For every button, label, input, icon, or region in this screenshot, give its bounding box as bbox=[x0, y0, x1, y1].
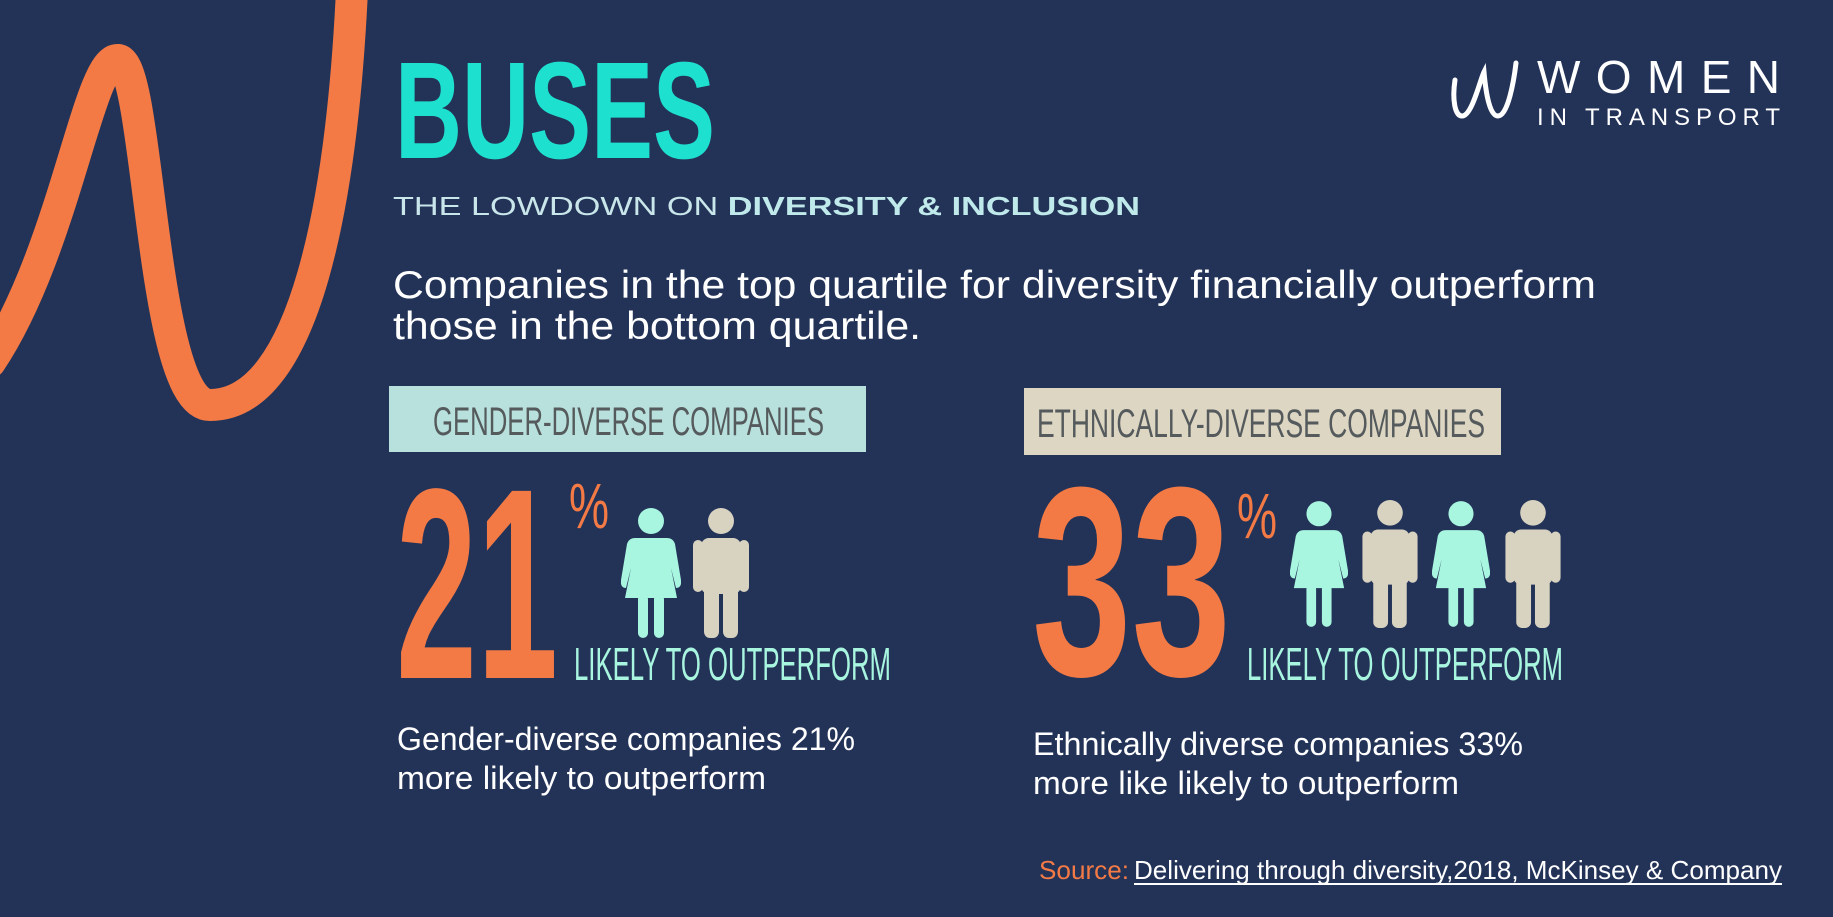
label box: ethnic: ETHNICALLY-DIVERSE COMPANIES bbox=[1037, 402, 1485, 446]
decorative orange swoosh bbox=[0, 0, 352, 405]
label box: gender bbox=[389, 386, 866, 452]
panel: ethnically-diverse bbox=[1024, 388, 1563, 801]
logo: IN TRANSPORT bbox=[1537, 104, 1780, 131]
title: BUSES bbox=[395, 34, 715, 188]
big number 33%: % bbox=[1237, 480, 1277, 552]
logo: WOMEN bbox=[1537, 51, 1780, 103]
likely to outperform label: LIKELY TO OUTPERFORM bbox=[1247, 638, 1563, 690]
icons: two women two men bbox=[1290, 500, 1561, 628]
intro paragraph bbox=[393, 264, 1596, 348]
body text gender: Gender-diverse companies 21% bbox=[397, 721, 855, 757]
body text ethnic bbox=[1033, 726, 1523, 801]
big number 33%: 33 bbox=[1032, 432, 1231, 733]
source: Source: bbox=[1039, 855, 1129, 885]
label box: ethnic bbox=[1024, 388, 1501, 455]
body text gender bbox=[397, 721, 855, 796]
body text ethnic: more like likely to outperform bbox=[1033, 765, 1459, 801]
source: Delivering through diversity,2018, McKinsey & Company bbox=[1134, 855, 1782, 885]
body text gender: more likely to outperform bbox=[397, 760, 766, 796]
body text ethnic: Ethnically diverse companies 33% bbox=[1033, 726, 1523, 762]
intro paragraph: Companies in the top quartile for diversity financially outperform bbox=[393, 264, 1596, 307]
panel: gender-diverse bbox=[389, 386, 891, 796]
subtitle: THE LOWDOWN ON DIVERSITY & INCLUSION bbox=[393, 191, 1140, 221]
likely to outperform label: LIKELY TO OUTPERFORM bbox=[574, 638, 891, 690]
logo bbox=[1454, 51, 1780, 131]
big number 21%: 21 bbox=[396, 432, 558, 736]
big number 21%: % bbox=[569, 470, 609, 542]
icons: woman and man bbox=[621, 508, 749, 638]
intro paragraph: those in the bottom quartile. bbox=[393, 305, 921, 348]
label box: gender: GENDER-DIVERSE COMPANIES bbox=[433, 400, 824, 444]
